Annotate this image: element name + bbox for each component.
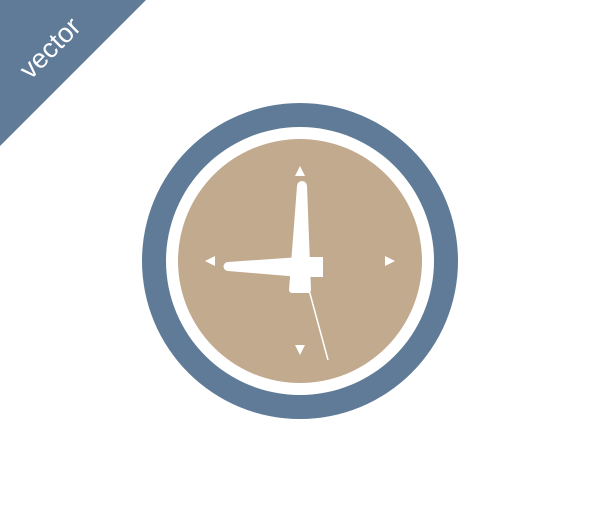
second hand (309, 290, 328, 360)
hour hand (224, 257, 323, 277)
corner banner (0, 0, 146, 146)
minute hand (289, 181, 311, 293)
hour markers (205, 166, 395, 355)
icon: clock (142, 103, 458, 419)
banner text: vector: vector (13, 11, 87, 85)
